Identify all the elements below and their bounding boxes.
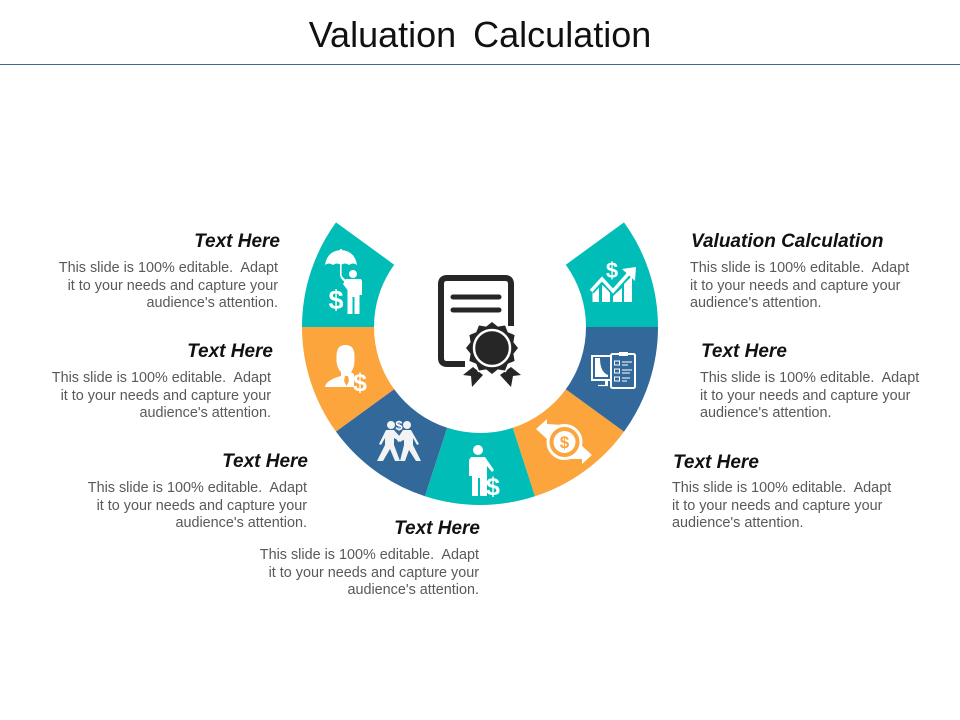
- text block: top right: This slide is 100% editable. Adapt it to your needs and capture your audience's attention.: [690, 260, 909, 311]
- icon: businessman with dollar: $: [353, 369, 367, 397]
- text block: lower left: [88, 451, 308, 531]
- icon: growth chart with dollar: $: [606, 258, 618, 283]
- text block: top right: [690, 231, 910, 311]
- text block: middle left: [52, 341, 273, 421]
- icon: dollar coin with exchange arrows: [536, 419, 592, 464]
- icon: growth chart with dollar: [591, 258, 636, 302]
- icon: businessman with dollar: [325, 345, 367, 397]
- text block: top right: Valuation Calculation: [691, 231, 884, 252]
- text block: top left: Text Here: [194, 231, 280, 252]
- icon: certificate: [441, 278, 521, 387]
- text block: right: Text Here: [701, 341, 787, 362]
- text block: right: [700, 341, 920, 421]
- title rule: [0, 64, 960, 65]
- icon: person with dollar: $: [486, 473, 500, 501]
- text block: bottom: This slide is 100% editable. Adapt it to your needs and capture your audience's attention.: [260, 547, 479, 598]
- text block: bottom: [260, 518, 480, 598]
- icon: dollar coin with exchange arrows: $: [560, 433, 570, 452]
- icon: handshake with dollar: $: [395, 418, 403, 433]
- segment: lower left blue: [336, 389, 447, 496]
- text block: middle left: This slide is 100% editable. Adapt it to your needs and capture your audience's attention.: [52, 370, 271, 421]
- segment: top left teal: [302, 222, 394, 327]
- icon: umbrella person with dollar: $: [328, 285, 344, 315]
- icon: person with dollar: [469, 445, 500, 501]
- segment: lower right orange: [513, 389, 624, 496]
- icon: umbrella person with dollar: [325, 249, 362, 315]
- text block: top left: This slide is 100% editable. Adapt it to your needs and capture your audience's attention.: [59, 260, 278, 311]
- segment: top right teal: [566, 222, 658, 327]
- text block: lower right: Text Here: [673, 452, 759, 473]
- text block: lower left: This slide is 100% editable. Adapt it to your needs and capture your audience's attention.: [88, 480, 307, 531]
- title: Valuation Calculation: [309, 14, 651, 55]
- text block: top left: [59, 231, 280, 311]
- segment: right blue: [566, 327, 658, 432]
- icon: monitor and checklist: [592, 352, 635, 388]
- icon: handshake with dollar: [377, 418, 421, 461]
- text block: lower left: Text Here: [222, 451, 308, 472]
- text block: lower right: [672, 452, 892, 531]
- text block: lower right: This slide is 100% editable. Adapt it to your needs and capture your audience's attention.: [672, 480, 891, 531]
- text block: middle left: Text Here: [187, 341, 273, 362]
- text block: bottom: Text Here: [394, 518, 480, 539]
- text block: right: This slide is 100% editable. Adapt it to your needs and capture your audience's attention.: [700, 370, 919, 421]
- segment: bottom teal: [425, 428, 535, 505]
- segment: left orange: [302, 327, 394, 432]
